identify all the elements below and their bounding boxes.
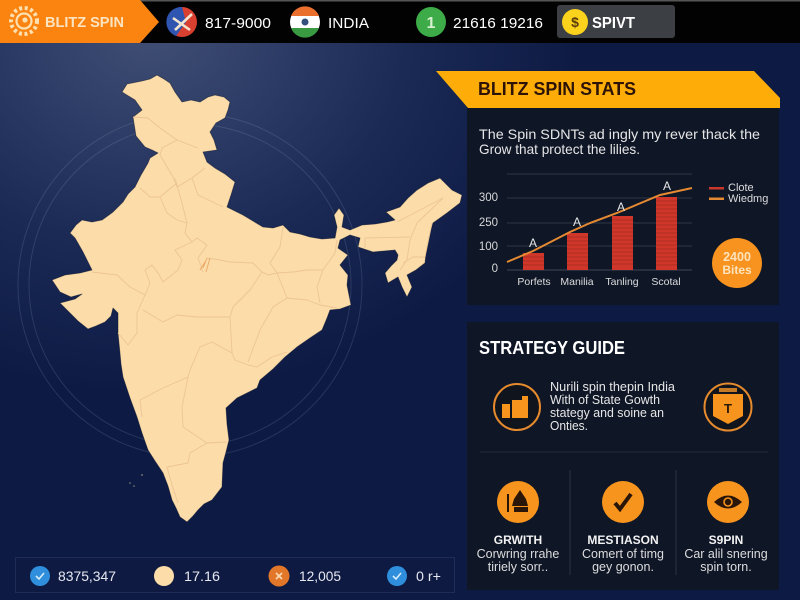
stat: cream bbox=[154, 566, 220, 586]
icon: shield badge bbox=[704, 384, 752, 430]
strategy text: stategy and soine an bbox=[550, 406, 664, 420]
callout badge: 2400 bbox=[723, 250, 751, 264]
heading ribbon: BLITZ SPIN STATS bbox=[478, 79, 636, 99]
heading ribbon bbox=[436, 71, 780, 108]
icon: green number badge: 1 bbox=[427, 15, 436, 32]
feature: mestiason: Comert of timg bbox=[582, 547, 664, 561]
feature: growth bbox=[477, 481, 559, 574]
strategy text: With of State Gowth bbox=[550, 393, 660, 407]
feature: spin: spin torn. bbox=[700, 560, 752, 574]
callout badge: Bites bbox=[722, 263, 752, 277]
bars bbox=[523, 197, 677, 270]
icon: green number badge bbox=[416, 7, 446, 37]
stat: cream: 17.16 bbox=[184, 568, 220, 584]
callout badge bbox=[712, 238, 762, 288]
stat: total: 8375,347 bbox=[58, 568, 116, 584]
brand tab: BLITZ SPIN bbox=[45, 14, 124, 31]
feature: growth: tiriely sorr.. bbox=[488, 560, 548, 574]
stat: plus: 0 r+ bbox=[416, 568, 441, 584]
strategy text: Nurili spin thepin India bbox=[550, 380, 675, 394]
header bar bbox=[0, 0, 800, 43]
feature: spin bbox=[684, 481, 768, 574]
icon: growth bars bbox=[494, 384, 540, 430]
chart legend bbox=[709, 182, 768, 205]
point markers: A bbox=[529, 236, 537, 250]
strategy text bbox=[550, 380, 675, 433]
bar and line chart bbox=[479, 174, 692, 288]
spin button bbox=[557, 5, 675, 38]
brand tab bbox=[0, 0, 159, 43]
category labels bbox=[517, 276, 681, 288]
icon: team badge bbox=[166, 7, 197, 37]
category labels: Scotal bbox=[651, 276, 681, 288]
point markers: A bbox=[663, 179, 671, 193]
stat: orange: 12,005 bbox=[299, 568, 341, 584]
feature: mestiason bbox=[582, 481, 664, 574]
map of India bbox=[52, 75, 462, 522]
islands bbox=[129, 474, 143, 487]
stat: total bbox=[30, 566, 116, 586]
stats description: The Spin SDNTs ad ingly my rever thack the bbox=[479, 126, 760, 142]
feature: growth: Corwring rrahe bbox=[477, 547, 559, 561]
axis labels: 300 bbox=[479, 192, 498, 204]
spin button: SPIVT bbox=[592, 15, 635, 32]
feature: mestiason: MESTIASON bbox=[587, 533, 659, 547]
spin button: $ bbox=[571, 14, 579, 30]
panel: strategy guide bbox=[467, 322, 779, 590]
decorative orbit rings bbox=[18, 113, 362, 457]
axis labels: 250 bbox=[479, 217, 498, 229]
stats description bbox=[479, 126, 760, 157]
icon: shield badge: T bbox=[724, 401, 732, 416]
header bar: 21616 19216 bbox=[453, 15, 543, 32]
category labels: Manilia bbox=[560, 276, 594, 288]
point markers bbox=[529, 179, 671, 250]
stat: plus bbox=[387, 566, 441, 586]
stats description: Grow that protect the lilies. bbox=[479, 141, 640, 157]
point markers: A bbox=[573, 215, 581, 229]
icon: India flag bbox=[290, 6, 320, 38]
axis labels: 100 bbox=[479, 241, 498, 253]
chart legend: Wiedmg bbox=[728, 193, 768, 205]
strategy text: Onties. bbox=[550, 419, 588, 433]
chart legend: Clote bbox=[728, 182, 754, 194]
panel: blitz spin stats bbox=[436, 71, 780, 305]
feature: mestiason: gey gonon. bbox=[592, 560, 654, 574]
header bar: 817-9000 bbox=[205, 15, 271, 32]
feature: spin: S9PIN bbox=[709, 533, 743, 547]
state borders bbox=[92, 117, 443, 503]
axis labels: 0 bbox=[492, 263, 498, 275]
bottom stats bar bbox=[16, 558, 454, 592]
stat: orange bbox=[268, 566, 341, 586]
feature: spin: Car alil snering bbox=[684, 547, 768, 561]
category labels: Porfets bbox=[517, 276, 551, 288]
axis labels bbox=[479, 192, 498, 275]
header bar: INDIA bbox=[328, 15, 369, 32]
category labels: Tanling bbox=[605, 276, 639, 288]
point markers: A bbox=[617, 200, 625, 214]
strategy heading: STRATEGY GUIDE bbox=[479, 338, 625, 358]
trend line bbox=[507, 188, 692, 262]
feature: growth: GRWITH bbox=[494, 533, 542, 547]
icon: sun logo bbox=[11, 8, 37, 34]
